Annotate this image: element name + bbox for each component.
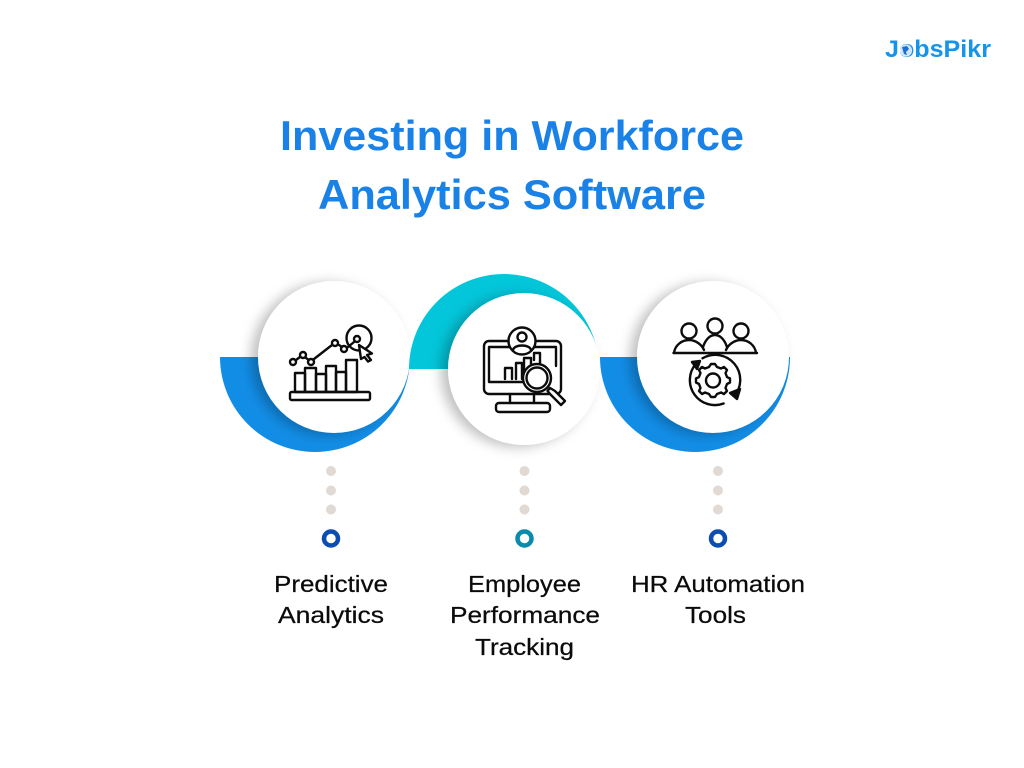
label: Employee Performance Tracking	[450, 571, 600, 660]
title: Investing in Workforce	[280, 112, 744, 159]
ring marker 1	[324, 532, 338, 546]
icon: monitor with person and magnifier	[484, 328, 565, 412]
label: Employee Performance Tracking: Performance	[450, 602, 600, 628]
dotted connector 3	[713, 466, 723, 514]
white circle middle	[448, 293, 600, 445]
logo: JobsPikr: JobsPikr	[885, 36, 991, 63]
blue half circle right	[600, 357, 790, 452]
label: HR Automation Tools	[631, 571, 805, 628]
panel: HR automation graphic	[600, 281, 790, 452]
title: Analytics Software	[318, 171, 706, 218]
ring marker 3	[711, 532, 725, 546]
label: Predictive Analytics	[274, 571, 388, 628]
ring marker 2	[518, 532, 532, 546]
dotted connector 2	[520, 466, 530, 514]
label: HR Automation Tools: HR Automation	[631, 571, 805, 597]
white circle right	[637, 281, 789, 433]
icon: team with automation gear	[674, 318, 757, 405]
white circle left	[258, 281, 410, 433]
panel: predictive analytics graphic	[220, 281, 410, 452]
label: Employee Performance Tracking: Employee	[468, 571, 581, 597]
teal half circle	[409, 274, 599, 369]
label: Predictive Analytics: Analytics	[278, 602, 384, 628]
icon: bar chart with trend line and cursor	[290, 326, 372, 400]
title	[280, 112, 744, 218]
blue half circle left	[220, 357, 410, 452]
panel: employee performance graphic	[409, 274, 600, 445]
label: Employee Performance Tracking: Tracking	[475, 634, 574, 660]
label: Predictive Analytics: Predictive	[274, 571, 388, 597]
dotted connector 1	[326, 466, 336, 514]
label: HR Automation Tools: Tools	[685, 602, 746, 628]
